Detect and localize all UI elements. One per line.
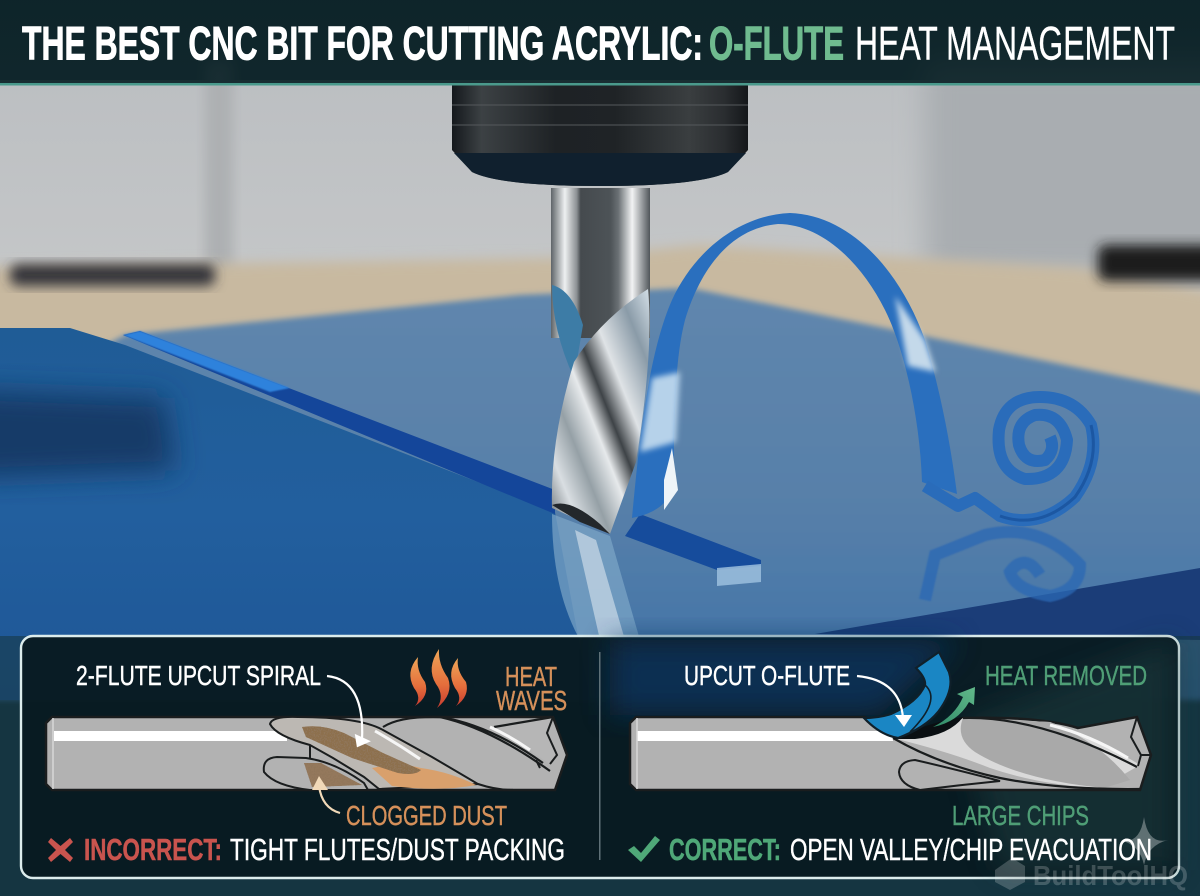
icon: o-flute drill bit [630,717,1151,790]
arrow: to clogged dust [312,776,340,813]
icon: red cross [48,838,73,862]
reflection of the bit [552,514,640,640]
orange heat stain [372,765,476,789]
saw groove in the acrylic [123,331,555,514]
drill point [1131,717,1151,766]
drill point [536,717,557,768]
open valley [893,718,1140,788]
title text: white lead: THE BEST CNC BIT FOR CUTTING ACRYLIC: [22,16,703,70]
label: heat waves: HEAT [505,661,557,692]
lower flute land [264,757,368,790]
rear flute [552,285,583,378]
acrylic chip curl [925,397,1093,520]
arrow: to o-flute [857,676,912,727]
verdict: incorrect: TIGHT FLUTES/DUST PACKING [230,832,565,867]
label: heat waves: WAVES [496,685,567,716]
helical land edges [383,717,553,790]
title text: green highlight: O-FLUTE [709,16,844,70]
chip highlights [640,372,680,452]
freshly cut strip [625,514,761,570]
watermark: BuildToolHQ: BuildToolHQ [1033,860,1188,891]
tip facet [494,717,557,764]
chip reflection [925,532,1080,600]
background photo: CNC workshop scene [0,60,1200,700]
packed dust upper [302,726,421,774]
workshop wall [0,80,1200,340]
title bar [0,0,1200,86]
icon: heat waves [410,649,467,708]
tool shank [551,188,650,338]
black chip throat [893,717,963,739]
wooden work surface [0,245,1200,460]
verdict: correct [669,832,1152,867]
icon: green check [628,836,660,862]
label: heat waves [496,661,567,716]
label: heat removed: HEAT REMOVED [985,660,1147,691]
comparison panel [21,636,1179,878]
label: clogged dust: CLOGGED DUST [346,800,507,831]
left foreground table [0,328,590,700]
icon: 2-flute drill bit [46,717,567,790]
packed dust lower [304,763,362,787]
upper flute land [270,717,478,789]
verdict: incorrect: INCORRECT: [84,832,222,867]
spindle [452,84,748,186]
label: upcut o-flute: UPCUT O-FLUTE [684,660,850,691]
acrylic sheet [0,288,1200,700]
verdict: incorrect [84,832,565,867]
bottom edge strip [0,636,1200,896]
label: large chips: LARGE CHIPS [952,800,1089,831]
cutting flutes [552,289,650,534]
acrylic chip arch [632,213,957,518]
panel: correct o-flute bit [628,652,1152,867]
navy shadow corner [815,568,1200,640]
verdict: correct: CORRECT: [669,832,781,867]
icon: blue large chip [864,652,951,738]
arrow: heat removed [933,687,975,727]
arrow: to flute [327,676,372,749]
panel: incorrect 2-flute bit [46,649,567,867]
icon: sparkle watermark [1120,817,1168,865]
lower flute [899,760,1000,790]
label: 2-flute upcut spiral: 2-FLUTE UPCUT SPIRAL [76,660,321,691]
